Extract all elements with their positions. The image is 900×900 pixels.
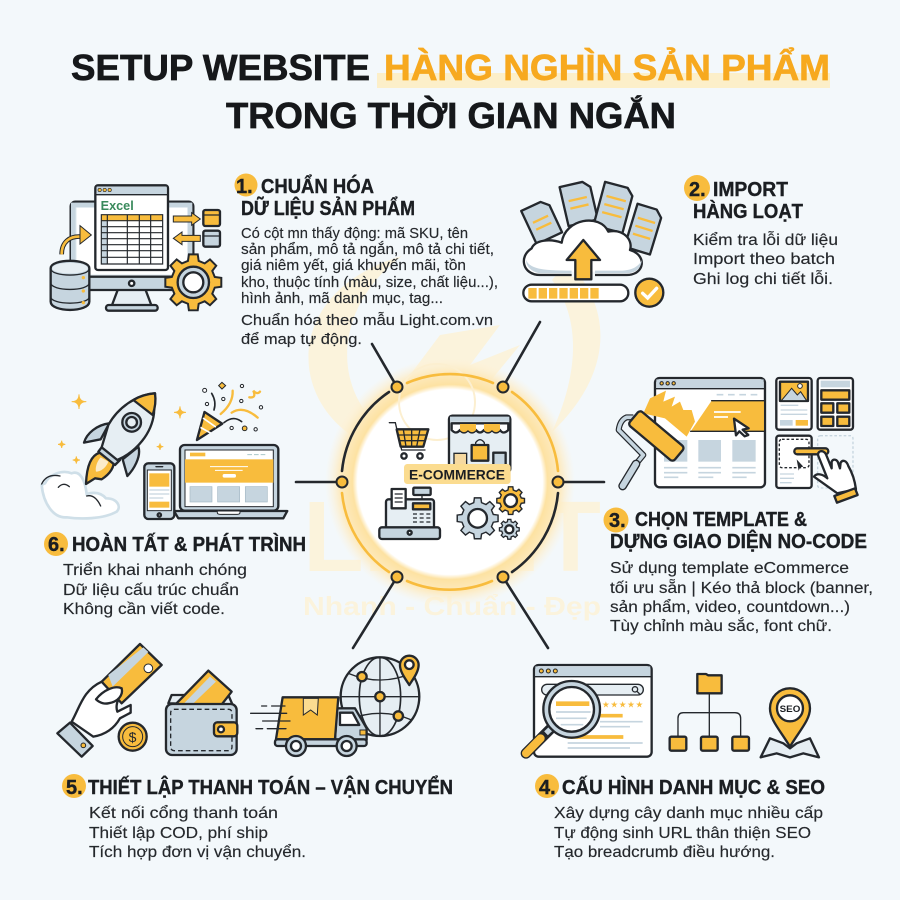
central hub: [296, 322, 604, 648]
text: step 1: hình ảnh, mã danh mục, tag...: [241, 290, 443, 307]
text: step 4: Xây dựng cây danh mục nhiều cấp: [554, 805, 823, 822]
text: step 5: Tích hợp đơn vị vận chuyển.: [89, 843, 306, 861]
text: step 3: Sử dụng template eCommerce: [610, 560, 849, 577]
heading: step 5: THIẾT LẬP THANH TOÁN – VẬN CHUYỂN: [88, 775, 453, 799]
text: step 2: Kiểm tra lỗi dữ liệu: [693, 230, 838, 249]
title: SETUP WEBSITE: [71, 47, 370, 88]
panel: step 3: [604, 378, 873, 635]
text: step 1: sản phẩm, mô tả ngắn, mô tả chi tiết,: [241, 241, 494, 258]
heading: step 4: 4.: [539, 777, 556, 799]
watermark logo: Nhanh - Chuẩn - Đẹp: [303, 591, 601, 621]
text: step 6: [63, 561, 247, 618]
title: TRONG THỜI GIAN NGẮN: [226, 94, 676, 136]
text: step 1: Chuẩn hóa theo mẫu Light.com.vn: [241, 312, 493, 329]
text: step 1: Có cột mn thấy động: mã SKU, tên: [241, 225, 468, 242]
panel: step 6: [42, 382, 306, 618]
icon: excel monitor and database: [51, 185, 221, 311]
icon: excel monitor and database: Excel: [101, 199, 134, 213]
heading: step 4: CẤU HÌNH DANH MỤC & SEO: [562, 776, 825, 799]
heading: step 3: DỰNG GIAO DIỆN NO-CODE: [610, 529, 867, 553]
heading: step 3: [604, 508, 867, 553]
panel: step 5: [57, 644, 453, 861]
icon: seo and category tree: [526, 665, 819, 757]
text: step 3: [610, 560, 873, 635]
text: step 5: Thiết lập COD, phí ship: [89, 825, 268, 842]
heading: step 3: CHỌN TEMPLATE &: [635, 509, 807, 531]
panel: step 2: [521, 175, 838, 307]
heading: step 2: HÀNG LOẠT: [693, 200, 803, 223]
text: step 3: sản phẩm, video, countdown...): [610, 598, 850, 616]
icon: payment and shipping: [57, 644, 419, 757]
heading: step 2: 2.: [689, 179, 706, 201]
icons: e-commerce: E-COMMERCE: [409, 467, 505, 482]
heading: step 1: 1.: [236, 176, 253, 198]
heading: step 2: [684, 175, 803, 223]
text: step 5: Kết nối cổng thanh toán: [89, 804, 278, 822]
text: step 6: Triển khai nhanh chóng: [63, 561, 247, 579]
text: step 2: Import theo batch: [693, 251, 835, 268]
heading: step 6: 6.: [48, 534, 65, 556]
text: step 1: [241, 225, 498, 348]
icon: payment and shipping: $: [129, 729, 137, 745]
text: step 3: tối ưu sẵn | Kéo thả block (banner,: [610, 578, 873, 597]
icon: rocket launch and devices: [42, 382, 287, 519]
title: [71, 46, 830, 136]
icons: e-commerce: [379, 416, 524, 539]
text: step 1: giá niêm yết, giá khuyến mãi, tồn: [241, 257, 466, 274]
heading: step 1: [234, 174, 415, 220]
heading: step 5: 5.: [66, 777, 83, 799]
text: step 6: Dữ liệu cấu trúc chuẩn: [63, 581, 239, 599]
text: step 3: Tùy chỉnh màu sắc, font chữ.: [610, 616, 832, 635]
panel: step 4: [526, 665, 825, 861]
text: step 4: [554, 805, 823, 861]
watermark logo: [303, 256, 601, 621]
icon: seo and category tree: ★★★★★: [602, 700, 644, 710]
text: step 4: Tự động sinh URL thân thiện SEO: [554, 825, 811, 842]
heading: step 1: CHUẨN HÓA: [261, 174, 374, 198]
text: step 2: [693, 230, 838, 288]
title: HÀNG NGHÌN SẢN PHẨM: [384, 46, 830, 88]
text: step 4: Tạo breadcrumb điều hướng.: [554, 844, 775, 861]
icon: template builder: [619, 378, 858, 503]
icon: cloud import: [521, 180, 663, 307]
panel: step 1: [51, 174, 498, 348]
heading: step 3: 3.: [609, 510, 626, 532]
watermark logo: LIGHT: [303, 481, 601, 593]
text: step 6: Không cần viết code.: [63, 601, 225, 618]
icon: seo and category tree: SEO: [780, 704, 800, 714]
text: step 1: để map tự động.: [241, 331, 362, 348]
heading: step 1: DỮ LIỆU SẢN PHẨM: [241, 196, 415, 220]
text: step 1: kho, thuộc tính (màu, size, chất liệu...),: [241, 274, 498, 291]
heading: step 2: IMPORT: [713, 179, 788, 201]
heading: step 6: HOÀN TẤT & PHÁT TRÌNH: [72, 533, 306, 556]
text: step 5: [89, 804, 306, 861]
text: step 2: Ghi log chi tiết lỗi.: [693, 269, 833, 288]
